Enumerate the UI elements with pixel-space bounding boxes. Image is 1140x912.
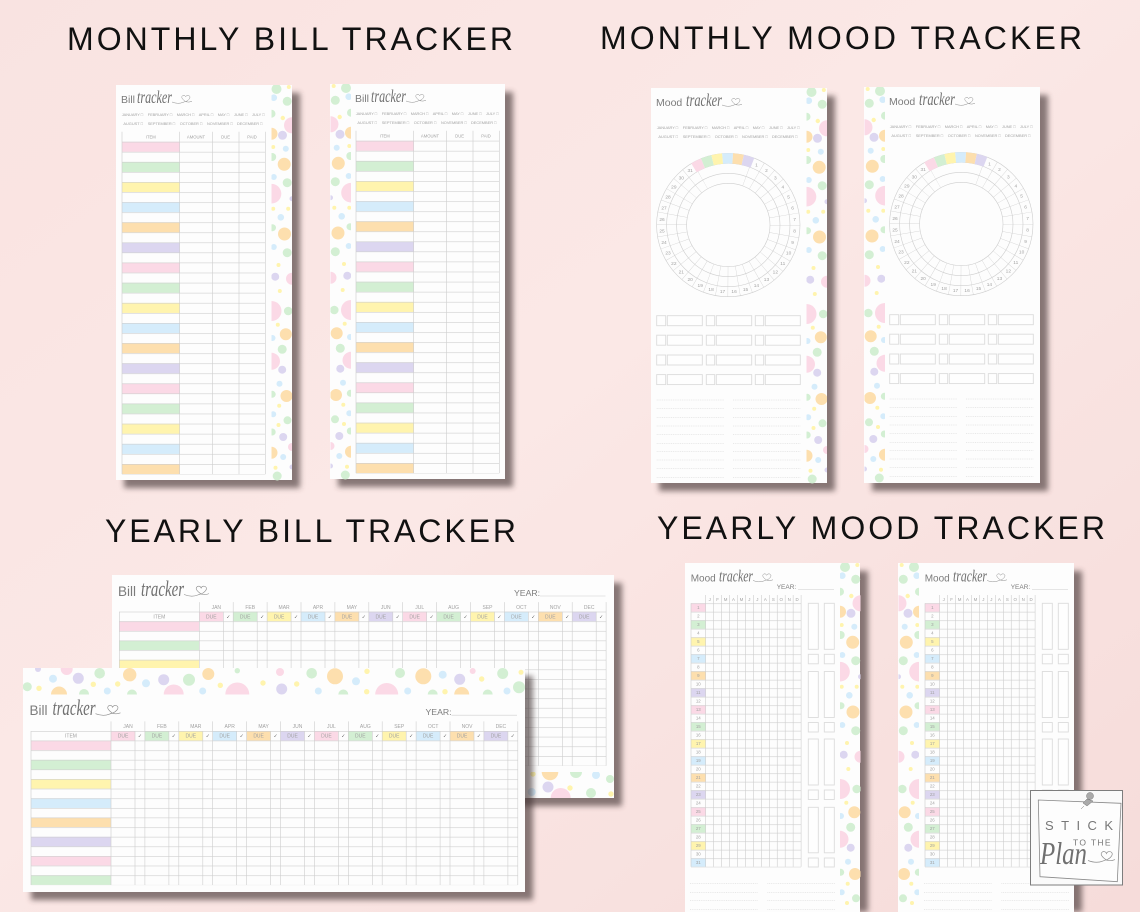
mood year grid: M xyxy=(724,597,728,602)
yearly bill table: DUE xyxy=(342,614,353,620)
mood year grid: N xyxy=(788,597,791,602)
logo text: Plan xyxy=(1039,835,1087,871)
bill table: ITEM xyxy=(146,134,156,139)
mood year grid: J xyxy=(748,597,751,602)
mood year grid: 18 xyxy=(696,750,701,755)
bill table: DUE xyxy=(221,134,230,139)
mood year grid: 6 xyxy=(697,648,700,653)
panel: yearly bill tracker back page xyxy=(112,575,622,808)
yearly bill table: MAR xyxy=(279,605,290,611)
icon: push pin xyxy=(1081,792,1094,809)
month checklist: DECEMBER □ xyxy=(237,121,263,126)
mood year grid xyxy=(925,595,1035,867)
yearly bill table: JUL xyxy=(415,605,424,611)
yearly bill table: ✓ xyxy=(531,614,536,620)
polka dot strip: bottom xyxy=(528,772,614,798)
bill table xyxy=(356,131,499,473)
year field: YEAR: xyxy=(777,584,796,591)
yearly bill table: ✓ xyxy=(362,614,366,620)
mood year grid: 16 xyxy=(696,733,701,738)
month checklist: APRIL □ xyxy=(199,112,214,117)
yearly bill table: DUE xyxy=(240,614,251,620)
month checklist: JUNE □ xyxy=(234,112,248,117)
mood year grid: 22 xyxy=(696,784,701,789)
polka dot strip xyxy=(330,84,351,480)
month checklist: JULY □ xyxy=(252,112,265,117)
mood year grid: 14 xyxy=(696,716,701,721)
mood year grid: 2 xyxy=(697,614,700,619)
mood year grid: 10 xyxy=(696,682,701,687)
yearly bill table: DUE xyxy=(511,614,522,620)
title: monthly bill tracker: MONTHLY BILL TRACKER xyxy=(67,21,513,57)
yearly bill table: DUE xyxy=(579,614,590,620)
yearly bill table: ✓ xyxy=(463,614,468,620)
mood wheel: 17 xyxy=(720,289,726,295)
panel: yearly mood tracker page 1 xyxy=(685,562,868,912)
bill table: AMOUNT xyxy=(187,134,206,139)
month checklist: FEBRUARY □ xyxy=(148,112,173,117)
yearly bill table: NOV xyxy=(550,605,561,611)
bill table: PAID xyxy=(247,134,257,139)
mood wheel: 24 xyxy=(661,240,667,246)
mood wheel: 15 xyxy=(743,287,749,293)
yearly bill table: JUN xyxy=(381,605,391,611)
yearly bill table: DUE xyxy=(308,614,319,620)
mood year grid: 25 xyxy=(696,809,701,814)
mood wheel: 26 xyxy=(659,217,665,223)
yearly bill table: DUE xyxy=(409,614,421,620)
page heading: tracker xyxy=(719,567,753,586)
panel: monthly bill tracker page 2 xyxy=(322,83,513,487)
page heading: Mood xyxy=(656,97,682,109)
polka dot strip xyxy=(272,85,292,480)
panel: yearly mood tracker page 2 xyxy=(890,562,1082,912)
mood year grid: 23 xyxy=(696,792,701,797)
yearly bill table: ✓ xyxy=(497,614,502,620)
yearly bill table: DEC xyxy=(584,605,595,611)
mood wheel: 21 xyxy=(679,270,684,276)
mood wheel: 12 xyxy=(773,270,778,276)
yearly bill table: ✓ xyxy=(430,614,434,620)
mood wheel xyxy=(637,133,820,317)
mood wheel: 10 xyxy=(786,251,792,257)
polka dot strip xyxy=(806,88,827,484)
logo text xyxy=(1039,818,1115,871)
yearly bill table xyxy=(31,721,518,885)
mood wheel: 9 xyxy=(791,240,794,246)
yearly bill table: ✓ xyxy=(396,614,400,620)
logo: stick to the plan xyxy=(1030,790,1122,885)
month checklist: AUGUST □ xyxy=(123,121,144,126)
page heading xyxy=(925,567,1007,586)
yearly bill table: APR xyxy=(313,605,324,611)
mood wheel: 19 xyxy=(698,283,703,289)
notes lines xyxy=(890,399,1033,476)
mood wheel: 5 xyxy=(787,194,790,200)
mood wheel: 8 xyxy=(793,228,796,234)
yearly bill table: DUE xyxy=(206,614,217,620)
yearly bill table: ✓ xyxy=(226,614,230,620)
yearly bill table: DUE xyxy=(376,614,387,620)
page heading xyxy=(656,90,742,110)
mood year grid: 5 xyxy=(697,639,700,644)
yearly bill table: ✓ xyxy=(565,614,569,620)
mood wheel: 3 xyxy=(774,176,777,182)
panel: monthly mood tracker page 2 xyxy=(856,86,1053,491)
mood legend boxes xyxy=(890,315,1033,384)
mood year grid: 12 xyxy=(696,699,701,704)
mood year grid: F xyxy=(716,597,719,602)
mood wheel: 25 xyxy=(659,228,665,234)
month checklist: SEPTEMBER □ xyxy=(148,121,176,126)
month checklist xyxy=(122,112,265,126)
mood year grid: M xyxy=(740,597,744,602)
mood wheel xyxy=(870,132,1053,316)
yearly bill table: DUE xyxy=(443,614,455,620)
mood year grid: 26 xyxy=(696,818,701,823)
mood year grid: J xyxy=(756,597,759,602)
year field xyxy=(777,584,834,591)
polka dot strip xyxy=(840,563,860,905)
yearly bill table: FEB xyxy=(245,605,256,611)
yearly bill table: SEP xyxy=(482,605,493,611)
panel: monthly mood tracker page 1 xyxy=(637,87,835,491)
mood wheel: 23 xyxy=(665,251,671,257)
mood year grid: 15 xyxy=(696,724,701,729)
page heading: Bill xyxy=(118,584,136,599)
mood wheel: 31 xyxy=(687,168,693,174)
month checklist xyxy=(356,111,499,125)
mood wheel: 29 xyxy=(671,184,677,190)
month checklist: JANUARY □ xyxy=(122,112,144,117)
mood year grid: 1 xyxy=(697,605,700,610)
mood year grid: 29 xyxy=(696,843,701,848)
page heading: tracker xyxy=(137,87,173,107)
mood year grid: 24 xyxy=(696,801,701,806)
page heading: Bill xyxy=(121,94,135,106)
mood wheel: 4 xyxy=(781,184,784,190)
mood year grid: 7 xyxy=(697,656,700,661)
month checklist xyxy=(890,124,1033,138)
mood year grid: A xyxy=(732,597,735,602)
mood year grid: 11 xyxy=(696,690,701,695)
page heading xyxy=(118,576,209,601)
mood year grid: 21 xyxy=(696,775,701,780)
month checklist: MAY □ xyxy=(218,112,230,117)
legend boxes xyxy=(808,603,834,867)
yearly bill table: DUE xyxy=(274,614,285,620)
mood year grid xyxy=(691,595,801,867)
panel: monthly bill tracker page 1 xyxy=(116,84,300,488)
mood year grid: 19 xyxy=(696,758,701,763)
mood wheel: 6 xyxy=(791,205,794,211)
mood wheel: 1 xyxy=(755,162,758,168)
mood year grid: 4 xyxy=(697,631,700,636)
yearly bill table: ✓ xyxy=(260,614,264,620)
yearly bill table: JAN xyxy=(212,605,221,611)
year field xyxy=(426,707,517,717)
mood wheel: 16 xyxy=(731,289,737,295)
page heading xyxy=(691,567,773,586)
yearly bill table xyxy=(119,602,606,766)
page heading: tracker xyxy=(686,90,723,110)
sticky note xyxy=(1038,800,1121,882)
notes lines xyxy=(690,883,835,909)
mood year grid: 30 xyxy=(696,852,701,857)
logo text: STICK xyxy=(1045,818,1113,833)
page heading xyxy=(30,695,120,720)
legend boxes xyxy=(1042,603,1068,867)
logo text: TO THE xyxy=(1073,838,1111,848)
yearly bill table: DUE xyxy=(545,614,556,620)
month checklist: OCTOBER □ xyxy=(180,121,203,126)
mood wheel: 30 xyxy=(679,176,684,182)
yearly bill table: MAY xyxy=(347,605,358,611)
mood wheel: 14 xyxy=(754,283,759,289)
year field xyxy=(514,588,606,598)
mood year grid: O xyxy=(779,597,783,602)
page heading: Mood xyxy=(691,574,716,585)
month checklist: MARCH □ xyxy=(177,112,195,117)
panel: yearly bill tracker front page xyxy=(23,663,533,900)
polka dot strip xyxy=(864,87,885,482)
yearly bill table: ✓ xyxy=(328,614,332,620)
mood year grid: 27 xyxy=(696,826,701,831)
mood year grid: 3 xyxy=(697,622,700,627)
mood wheel: 20 xyxy=(687,277,693,283)
mood year grid: 13 xyxy=(696,707,701,712)
month checklist xyxy=(657,125,800,139)
yearly bill table: AUG xyxy=(448,605,459,611)
mood wheel: 11 xyxy=(780,261,786,267)
mood legend boxes xyxy=(657,316,800,385)
mood year grid: J xyxy=(709,597,711,602)
page heading xyxy=(889,89,975,109)
title: monthly mood tracker: MONTHLY MOOD TRACKER xyxy=(600,20,1082,56)
notes lines xyxy=(924,883,1069,909)
yearly bill table: ✓ xyxy=(294,614,298,620)
mood year grid: 31 xyxy=(696,860,701,865)
month checklist: NOVEMBER □ xyxy=(207,121,233,126)
page heading: tracker xyxy=(141,576,184,601)
mood year grid: 17 xyxy=(696,741,701,746)
mood wheel: 22 xyxy=(671,261,677,267)
mood year grid: A xyxy=(764,597,767,602)
bill table xyxy=(122,132,265,474)
year field: YEAR: xyxy=(514,588,540,598)
notes lines xyxy=(657,400,800,477)
mood year grid: 20 xyxy=(696,767,701,772)
yearly bill table: ITEM xyxy=(153,614,165,620)
mood year grid: S xyxy=(772,597,775,602)
yearly bill table: DUE xyxy=(477,614,488,620)
year field xyxy=(1011,584,1068,591)
title: yearly bill tracker: YEARLY BILL TRACKER xyxy=(105,513,516,549)
polka dot strip xyxy=(898,563,919,905)
mood year grid: 8 xyxy=(697,665,700,670)
mood wheel: 13 xyxy=(764,277,769,283)
mood year grid: 9 xyxy=(697,673,700,678)
mood year grid: D xyxy=(796,597,799,602)
yearly bill table: ✓ xyxy=(599,614,603,620)
mood wheel: 2 xyxy=(765,168,768,174)
page heading xyxy=(355,86,426,106)
mood wheel: 7 xyxy=(793,217,796,223)
mood wheel: 28 xyxy=(665,194,671,200)
title: yearly mood tracker: YEARLY MOOD TRACKER xyxy=(657,510,1105,546)
mood wheel: 27 xyxy=(661,205,667,211)
mood wheel: 18 xyxy=(708,287,714,293)
polka dot strip: top xyxy=(23,668,525,694)
mood year grid: 28 xyxy=(696,835,701,840)
yearly bill table: OCT xyxy=(516,605,527,611)
